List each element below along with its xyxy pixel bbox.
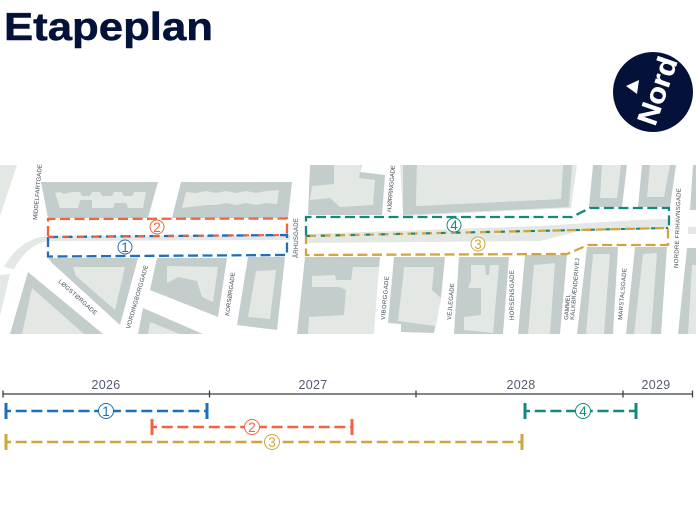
map: street names: KALKBRÆNDERIVEJ [570,258,581,320]
map area 4 centre overlay [306,228,668,236]
map: city blocks [0,165,696,334]
logo: Nord badge: Nord [631,53,683,129]
map badge 3: 3 [474,237,482,252]
title: Etapeplan [4,6,213,49]
map area 1 outline [48,235,287,256]
timeline bar: stage 1: 1 [102,404,110,419]
timeline bar: stage 2 [152,419,352,435]
timeline bar: stage 2: 2 [248,420,256,435]
timeline axis with years: 2028 [506,378,536,392]
map: street names: ÅRHUSGADE [293,218,300,258]
map badge 1: 1 [121,240,129,255]
timeline bar: stage 1 [6,403,207,419]
map: street names: MIDDELFARTGADE [33,164,44,220]
timeline bar: stage 4: 4 [579,404,587,419]
map area 2 outline [48,218,287,236]
timeline bar: stage 3 [6,434,522,450]
map: street names: VORDINGBORGGADE [126,264,150,330]
map: street names: VIBORGGADE [381,276,391,320]
map area 3 outline [306,228,668,255]
logo: Nord badge [613,52,693,132]
map badge 3 [471,237,485,252]
map: street names: LØGSTØRGADE [57,279,98,317]
map badge 2 [150,220,164,235]
map area 2 centre overlay [48,235,287,237]
map area 4 outline [306,208,669,236]
map: street names: MARSTALSGADE [618,268,629,320]
timeline axis with years: 2027 [298,378,328,392]
map: street names: HJØRRINGGADE [387,165,397,212]
timeline bar: stage 4 [525,403,636,419]
map badge 4: 4 [450,218,458,233]
map: street names: GAMMEL [564,293,572,320]
map: street names [33,164,683,330]
map: street names: NORDRE FRIHAVNSGADE [674,188,683,268]
map of the street and surrounding blocks [0,164,696,334]
map badge 1 [118,240,132,255]
map: street names: HORSENSGADE [510,270,516,320]
timeline axis with years: 2029 [641,378,671,392]
map badge 4 [447,218,461,233]
timeline axis with years [3,378,692,398]
timeline axis with years: 2026 [91,378,121,392]
map: street names: KORSØRGADE [225,272,237,316]
timeline bar: stage 3: 3 [268,435,276,450]
map: street names: VEJLEGADE [447,283,456,320]
map badge 2: 2 [153,220,161,235]
